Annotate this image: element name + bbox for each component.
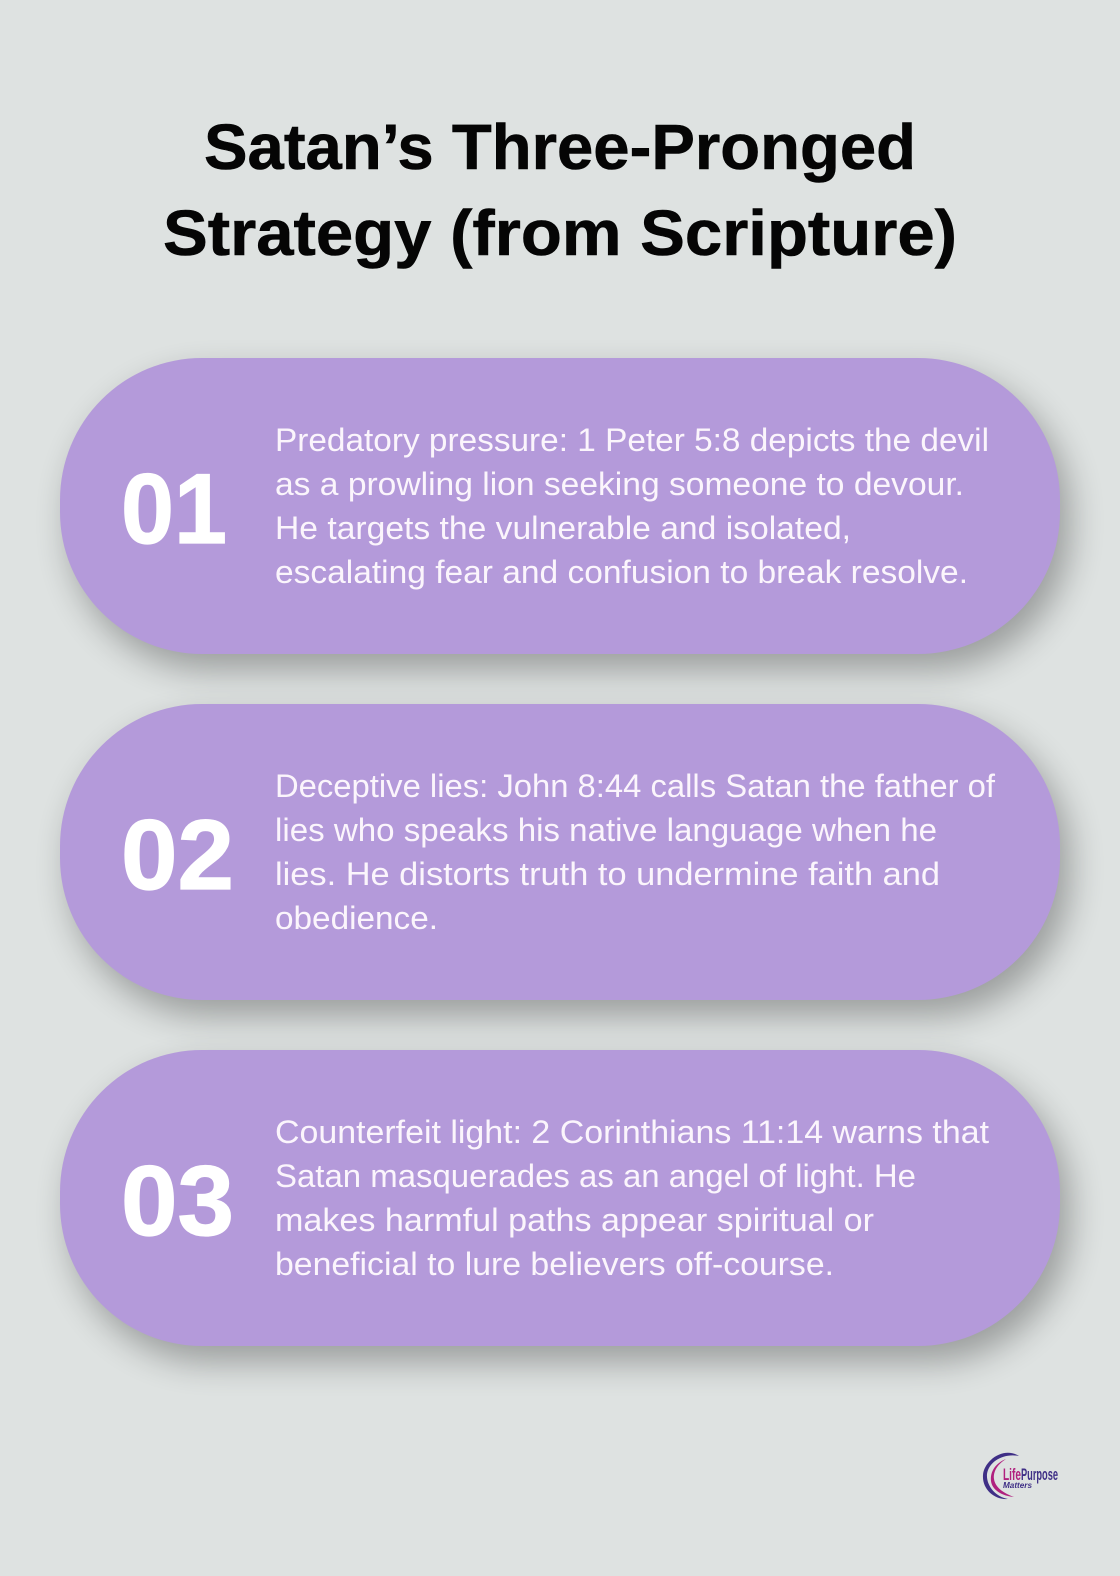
number 02: 02 xyxy=(121,799,234,910)
text: deceptive lies: obedience. xyxy=(275,900,438,936)
text: predatory pressure xyxy=(275,422,989,590)
panel: counterfeit light xyxy=(60,1050,1070,1362)
logo: Life Purpose Matters xyxy=(983,1453,1058,1499)
text: counterfeit light: Counterfeit light: 2 Corinthians 11:14 warns that xyxy=(275,1114,989,1150)
text: predatory pressure: Predatory pressure: 1 Peter 5:8 depicts the devil xyxy=(275,422,989,458)
text: deceptive lies: Deceptive lies: John 8:44 calls Satan the father of xyxy=(275,768,995,804)
text: deceptive lies: lies. He distorts truth to undermine faith and xyxy=(275,856,940,892)
text: deceptive lies xyxy=(275,768,995,936)
panel: deceptive lies xyxy=(60,704,1070,1016)
text: counterfeit light: Satan masquerades as an angel of light. He xyxy=(275,1158,916,1194)
text: predatory pressure: He targets the vulnerable and isolated, xyxy=(275,510,851,546)
title: Strategy (from Scripture) xyxy=(163,197,957,269)
logo: Life Purpose Matters: Purpose xyxy=(1021,1465,1058,1484)
text: counterfeit light: beneficial to lure believers off-course. xyxy=(275,1246,834,1282)
title: Satan’s Three-Pronged xyxy=(204,111,916,183)
text: counterfeit light xyxy=(275,1114,989,1282)
text: predatory pressure: escalating fear and confusion to break resolve. xyxy=(275,554,968,590)
text: predatory pressure: as a prowling lion seeking someone to devour. xyxy=(275,466,964,502)
number 01: 01 xyxy=(121,453,227,564)
title xyxy=(163,111,957,269)
text: deceptive lies: lies who speaks his native language when he xyxy=(275,812,937,848)
text: counterfeit light: makes harmful paths appear spiritual or xyxy=(275,1202,874,1238)
number 03: 03 xyxy=(121,1145,234,1256)
panel: predatory pressure xyxy=(60,358,1070,670)
logo: Life Purpose Matters: Matters xyxy=(1003,1481,1033,1490)
logo: Life Purpose Matters: Life xyxy=(1003,1465,1021,1484)
